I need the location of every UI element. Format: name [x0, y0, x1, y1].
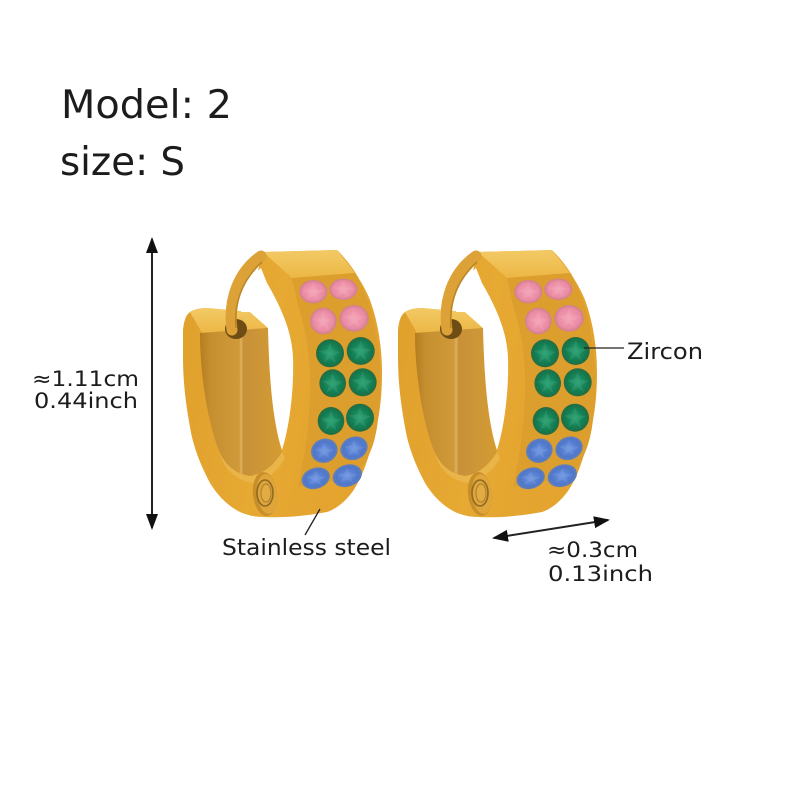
label: width [547, 538, 653, 586]
label: height: ≈1.11cm [32, 367, 139, 391]
label: height [32, 367, 139, 413]
arrow: width dimension [494, 520, 608, 538]
label: width: 0.13inch [548, 562, 653, 586]
leader: zircon [584, 347, 624, 349]
title: model: Model: 2 [61, 83, 232, 128]
label: width: ≈0.3cm [547, 538, 638, 562]
label: height: 0.44inch [34, 389, 138, 413]
earring: right [398, 250, 597, 517]
label: zircon: Zircon [627, 340, 703, 365]
leader: stainless steel [305, 509, 320, 535]
arrow: height dimension [151, 239, 153, 528]
earring: left [183, 250, 382, 517]
title: size: size: S [60, 140, 185, 185]
label: stainless steel: Stainless steel [222, 536, 391, 561]
